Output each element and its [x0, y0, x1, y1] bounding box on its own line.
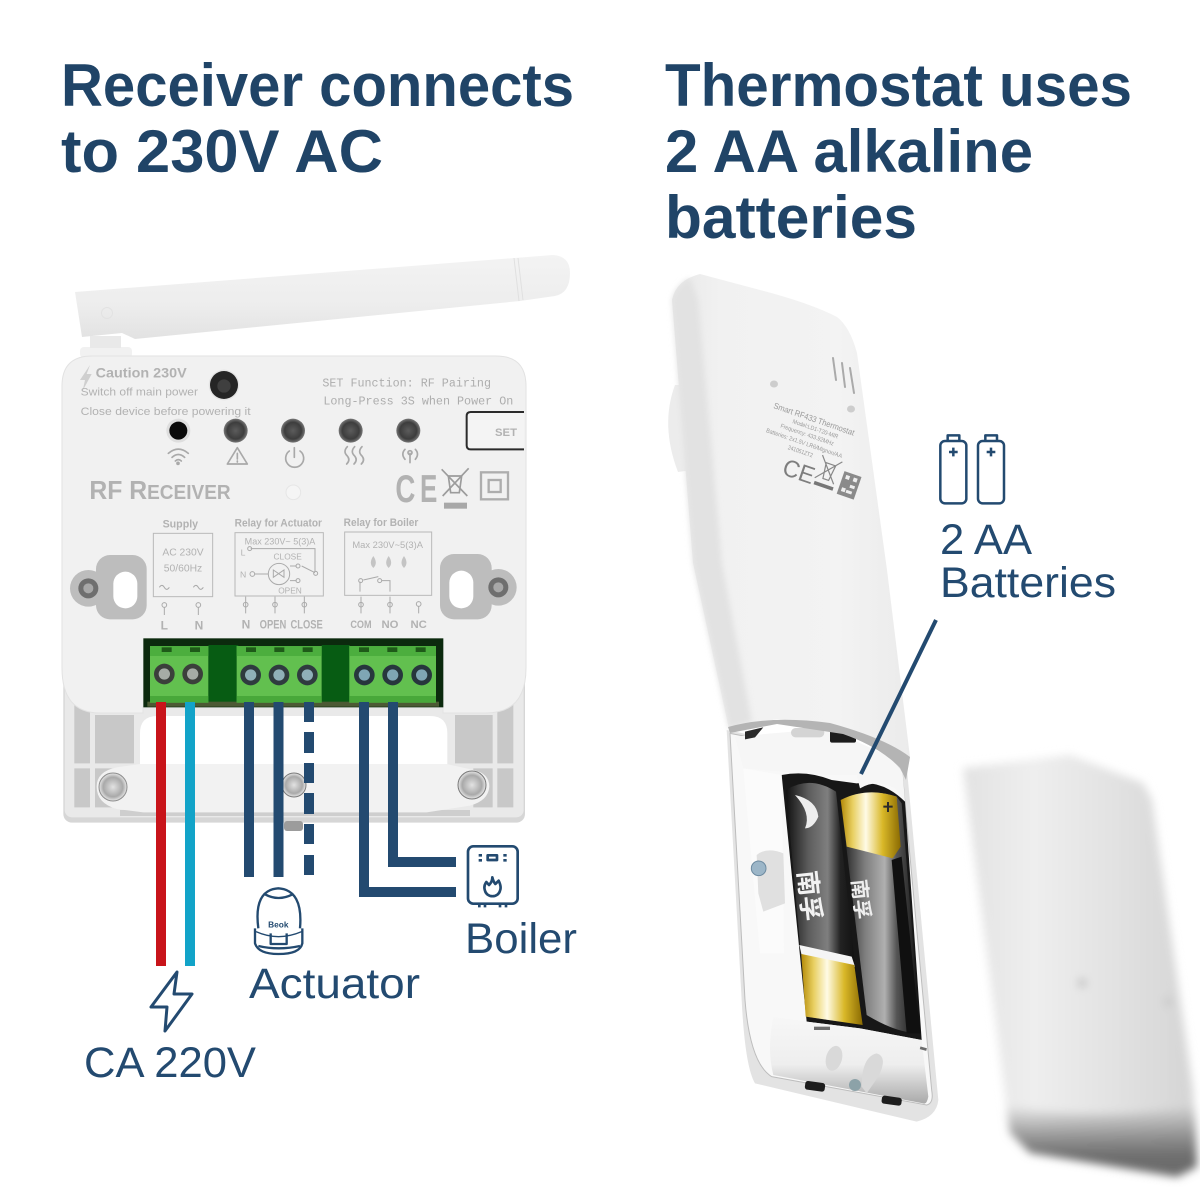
- supply diagram: AC 230V: [162, 548, 204, 559]
- battery left: [786, 783, 863, 1025]
- CE mark: C: [395, 467, 415, 511]
- receiver housing lower frame: [63, 663, 525, 823]
- set function text: Long-Press 3S when Power On: [323, 394, 513, 408]
- heading: thermostat: 2 AA alkaline: [665, 118, 1033, 185]
- actuator relay diagram: OPEN: [278, 585, 302, 595]
- icon: actuator: [255, 888, 302, 954]
- heading: thermostat: [665, 52, 1132, 251]
- boiler relay diagram: Max 230V~5(3)A: [352, 540, 424, 550]
- supply diagram: 50/60Hz: [164, 563, 202, 574]
- boiler relay diagram: COM: [350, 619, 372, 631]
- icon: actuator: Beok: [268, 919, 289, 929]
- shell lip: [728, 720, 910, 780]
- heading: receiver: to 230V AC: [61, 118, 383, 185]
- heading: receiver: Receiver connects: [61, 52, 574, 119]
- double insulation mark: [481, 472, 508, 499]
- actuator relay diagram: Max 230V~ 5(3)A: [245, 536, 316, 546]
- actuator relay diagram: N: [242, 618, 250, 632]
- pairing dimple: [286, 485, 301, 500]
- right mounting slot: [440, 554, 517, 619]
- left mounting slot: [70, 555, 147, 619]
- boiler relay diagram: Relay for Boiler: [344, 517, 418, 529]
- CE mark on thermostat: CE: [779, 454, 818, 490]
- label: CA 220V: CA 220V: [84, 1039, 256, 1087]
- CE mark: [395, 467, 437, 511]
- heading: thermostat: batteries: [665, 184, 917, 251]
- shell side shading: [672, 278, 752, 729]
- detached battery cover: [963, 755, 1197, 1177]
- WEEE and QR marks: [812, 455, 864, 500]
- actuator relay diagram: OPEN: [260, 618, 286, 632]
- supply diagram: L: [161, 618, 168, 632]
- terminal block: boiler: [349, 646, 436, 703]
- rating label: Frequency: 433.92MHz: [779, 424, 834, 447]
- wire: live red: [156, 702, 166, 966]
- LED icons: [168, 447, 417, 467]
- indicator LEDs: [166, 419, 420, 443]
- CE mark: E: [420, 467, 437, 511]
- icon: boiler: [468, 846, 518, 907]
- terminal block: actuator: [237, 646, 322, 703]
- actuator relay diagram: N: [240, 569, 246, 579]
- battery tray top: [743, 768, 784, 953]
- icon: two AA batteries: [940, 435, 1004, 503]
- RF Receiver logo: RF RECEIVER: [89, 475, 231, 505]
- dial behind body: [668, 385, 692, 472]
- actuator relay diagram: CLOSE: [290, 618, 323, 632]
- terminal recess and blocks: [143, 638, 443, 707]
- top notches: [745, 727, 856, 743]
- icon: caution bolt: [80, 365, 92, 391]
- boiler relay diagram: [344, 517, 432, 631]
- side clip and screw: [751, 850, 785, 912]
- label: 2 AA batteries: Batteries: [940, 559, 1116, 607]
- thermostat device: [668, 274, 938, 1122]
- WEEE mark: [442, 468, 469, 509]
- boiler relay diagram: NO: [381, 619, 399, 631]
- label: boiler: Boiler: [465, 915, 577, 963]
- SET button: SET: [495, 427, 517, 439]
- label: actuator: Actuator: [249, 960, 420, 1008]
- boiler relay diagram: NC: [410, 619, 427, 631]
- leader line: [861, 620, 936, 774]
- label: 2 AA batteries: 2 AA: [940, 516, 1032, 564]
- actuator relay diagram: L: [241, 548, 246, 558]
- rating label: Batteries: 2x1.5V LR6/Mignon/AA: [765, 428, 843, 460]
- terminal block: supply: [150, 646, 208, 703]
- battery right: 南孚: [847, 878, 874, 920]
- caution text: Switch off main power: [81, 386, 198, 398]
- label: 2 AA batteries: [940, 516, 1116, 607]
- caution text: [81, 364, 252, 418]
- heading: thermostat: Thermostat uses: [665, 52, 1132, 119]
- actuator relay diagram: Relay for Actuator: [235, 518, 322, 530]
- lower shelf: [770, 1017, 928, 1104]
- actuator relay diagram: [235, 518, 323, 632]
- bar screws: [99, 771, 486, 831]
- supply diagram: N: [195, 618, 203, 632]
- battery right: [841, 792, 921, 1033]
- set function text: SET Function: RF Pairing: [322, 377, 491, 391]
- SET button: [467, 412, 524, 449]
- wire: neutral blue: [185, 702, 195, 966]
- upper shell: [672, 274, 910, 778]
- rating label: 241051ZT2: [787, 445, 814, 459]
- vent slots and dots: [770, 358, 855, 412]
- heading: receiver: [61, 52, 574, 185]
- battery left: 南孚: [792, 869, 825, 922]
- icon: lightning bolt: [151, 972, 192, 1031]
- rating label: Model:LD1-T20-MIR: [791, 419, 839, 441]
- rating label: Smart RF433 Thermostat: [772, 400, 856, 438]
- caution text: Close device before powering it: [81, 406, 252, 418]
- antenna: [75, 255, 570, 358]
- shelf holes and screw: [804, 1027, 927, 1106]
- wires: boiler: [364, 702, 456, 892]
- black screw: [209, 370, 239, 400]
- set function text: [322, 377, 513, 408]
- caution text: Caution 230V: [96, 364, 187, 380]
- receiver printed panel: [70, 364, 524, 632]
- receiver front plate: [62, 356, 526, 713]
- supply diagram: [153, 518, 213, 632]
- actuator relay diagram: CLOSE: [274, 552, 302, 562]
- battery bay: [782, 773, 922, 1040]
- battery shell: [727, 727, 938, 1122]
- wires: actuator: [244, 702, 314, 877]
- rating label: [761, 400, 856, 470]
- supply diagram: Supply: [163, 518, 198, 530]
